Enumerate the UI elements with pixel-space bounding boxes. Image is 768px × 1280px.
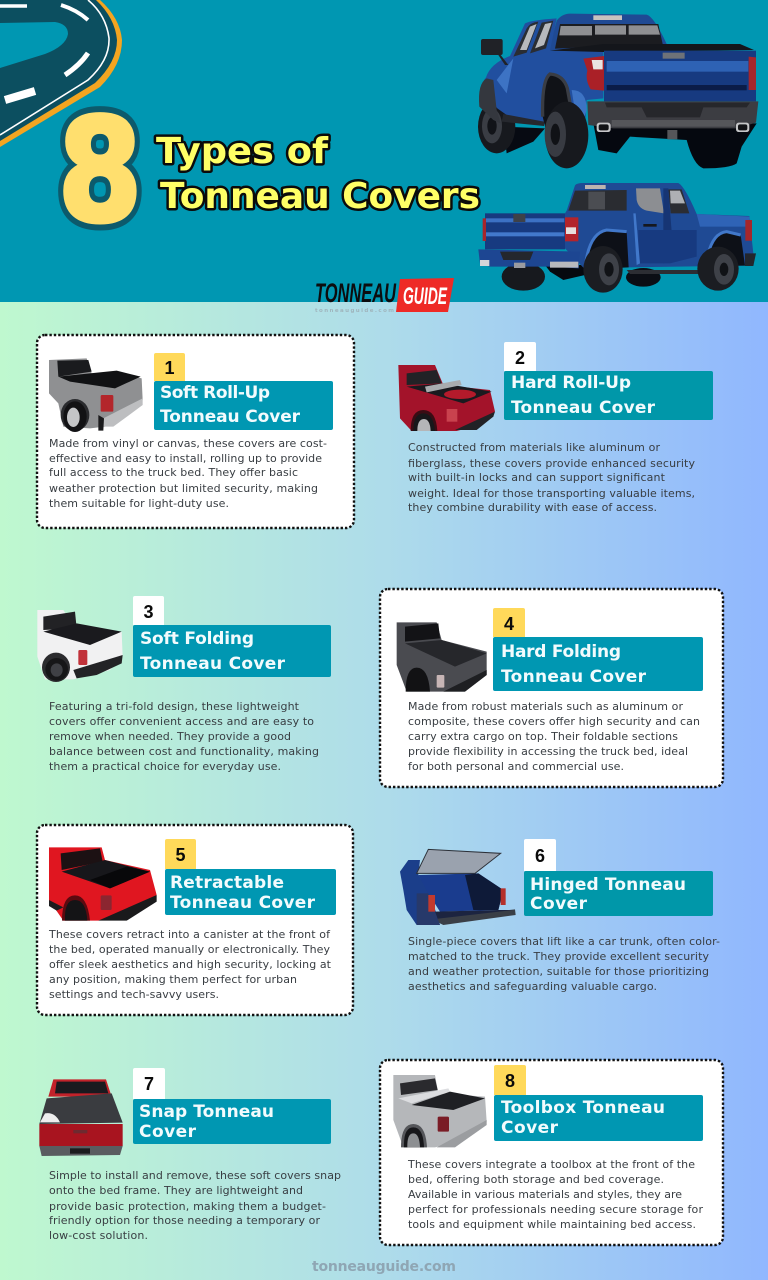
description: the bed, operated manually or electronically. They [49,943,330,956]
description [408,441,695,514]
description: effective and easy to install, rolling up to provide [49,452,322,465]
title bar: Cover [501,1118,559,1138]
description: and weather protection, suitable for those prioritizing [408,965,709,978]
description: tools and equipment while maintaining bed access. [408,1218,696,1231]
description: balance between cost and functionality, making [49,745,319,758]
description [408,700,700,773]
description: low-cost solution. [49,1229,148,1242]
header band [0,0,768,314]
title bar: Snap Tonneau [139,1102,274,1122]
panel: hinged cover [400,839,720,993]
title bar: Hard Folding [501,642,621,662]
description [408,935,720,993]
description: friendly option for those needing a temporary or [49,1214,320,1227]
title bar: Hard Roll-Up [511,373,631,393]
description: Featuring a tri-fold design, these lightweight [49,700,300,713]
title bar [133,1099,331,1144]
image: red truck with retractable cover [49,847,157,921]
big number 8: 8 [58,89,142,254]
description: full access to the truck bed. They offer basic [49,466,298,479]
description: composite, these covers offer high security and can [408,715,700,728]
description: remove when needed. They provide a good [49,730,291,743]
big number 8: 8 [58,89,142,254]
description: onto the bed frame. They are lightweight and [49,1184,303,1197]
description: Made from robust materials such as aluminum or [408,700,683,713]
description: matched to the truck. They provide excellent security [408,950,709,963]
description: Simple to install and remove, these soft covers snap [49,1169,341,1182]
image: red truck rear view with snap cover [39,1079,123,1156]
title bar: Tonneau Cover [501,667,647,687]
panel: toolbox cover [380,1060,723,1245]
number badge 2: 2 [515,348,525,368]
title bar: Cover [139,1122,197,1142]
footer website text: tonneauguide.com [312,1259,456,1275]
title bar [494,1095,703,1141]
number badge 6: 6 [535,846,545,866]
title bar: Toolbox Tonneau [501,1098,665,1118]
number badge 4: 4 [504,614,514,634]
number badge 8 [494,1065,526,1095]
title bar: Retractable [170,873,284,893]
title bar [165,869,336,915]
description: provide basic protection, making them a budget- [49,1200,326,1213]
description [49,700,319,773]
image: silver truck with roll-up cover [49,358,143,432]
title: Tonneau Covers [160,176,480,217]
description [48,928,332,1001]
panel: soft folding cover [37,596,331,773]
number badge 3: 3 [143,602,154,622]
image: white truck with folding cover [37,610,123,682]
panel frame [37,825,353,1015]
description: Constructed from materials like aluminum or [408,441,660,454]
panel frame [380,1060,723,1245]
title bar [133,625,331,677]
title bar: Tonneau Cover [511,398,656,418]
image: red truck with hard roll-up cover [398,365,495,431]
logo: GUIDE [403,283,448,310]
title bar: Tonneau Cover [140,654,286,674]
number badge 2 [504,342,536,371]
description: them suitable for light-duty use. [49,497,229,510]
description: them a practical choice for everyday use. [49,760,281,773]
description: any position, making them perfect for urban [49,973,297,986]
description: Made from vinyl or canvas, these covers are cost- [49,437,327,450]
panel: hard roll-up cover [398,342,713,514]
image: blue truck with hinged cover raised [400,849,516,925]
description: carry extra cargo on top. Their foldable sections [408,730,678,743]
image: silver truck with toolbox cover [393,1075,487,1147]
title bar [154,381,333,430]
panel: soft roll-up cover [37,335,354,528]
title bar: Soft Folding [140,629,254,649]
description: aesthetics and safeguarding valuable cargo. [408,980,657,993]
title bar: Soft Roll-Up [160,383,270,403]
number badge 6 [524,839,556,871]
description [407,1158,703,1231]
number badge 3 [133,596,164,625]
description: covers offer convenient access and are easy to [49,715,314,728]
panel: retractable cover [37,825,353,1015]
description: weather protection but limited security, making [49,482,318,495]
title bar: Hinged Tonneau [530,875,686,895]
description: bed, offering both storage and bed coverage. [408,1173,664,1186]
number badge 5: 5 [175,845,186,865]
description: provide flexibility in accessing the truck bed, ideal [408,745,688,758]
number badge 7: 7 [144,1074,154,1094]
number badge 7 [133,1068,165,1099]
description [49,1169,341,1242]
description: with built-in locks and can support significant [408,471,666,484]
description: offer sleek aesthetics and high security, locking at [49,958,332,971]
number badge 1 [154,353,185,381]
description: perfect for professionals needing secure storage for [408,1203,703,1216]
number badge 1: 1 [164,358,175,378]
image: dark truck with hard folding cover [397,622,487,692]
description: settings and tech-savvy users. [49,988,219,1001]
description: Available in various materials and styles, they are [408,1188,682,1201]
description: fiberglass, these covers provide enhanced security [408,457,695,470]
title bar: Cover [530,894,588,914]
icon: blue truck rear side view [478,183,756,293]
title bar [504,371,713,420]
title bar [524,871,713,916]
number badge 4 [493,608,525,637]
title bar [493,637,703,691]
logo: TONNEAU [315,278,397,308]
description: weight. Ideal for those transporting valuable items, [408,487,695,500]
description: they combine durability with ease of access. [408,501,657,514]
description: Single-piece covers that lift like a car trunk, often color- [408,935,720,948]
icon: blue truck rear three-quarter view [478,14,758,168]
logo: tonneauguide.com [315,308,394,314]
title: Types of [156,131,328,172]
panel: snap cover [39,1068,341,1242]
panel frame [37,335,354,528]
icon: curved road [0,0,122,147]
title [156,131,480,217]
description: These covers retract into a canister at the front of [48,928,331,941]
number badge 5 [165,839,196,869]
panel: hard folding cover [380,589,723,787]
description: These covers integrate a toolbox at the front of the [407,1158,695,1171]
description: for both personal and commercial use. [408,760,624,773]
title bar: Tonneau Cover [160,407,301,427]
panel frame [380,589,723,787]
description [49,437,327,510]
number badge 8: 8 [505,1071,515,1091]
title bar: Tonneau Cover [170,893,316,913]
